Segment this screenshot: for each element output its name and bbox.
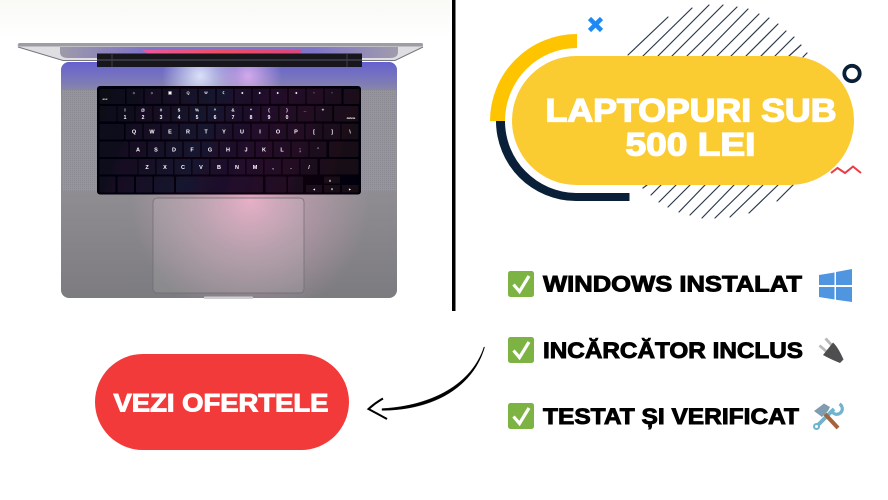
label: incarcator inclus: INCĂRCĂTOR INCLUS <box>543 338 803 363</box>
button: vezi ofertele: VEZI OFERTELE <box>114 390 328 418</box>
button: vezi ofertele <box>95 354 349 450</box>
laptop lid <box>17 43 423 60</box>
key labels: delete <box>347 116 356 120</box>
label: testat si verificat: TESTAT ȘI VERIFICAT <box>543 404 800 429</box>
icon: check mark <box>508 337 534 363</box>
feature: charger included <box>508 337 844 363</box>
key labels: QWERTYUIOP[]\ <box>132 130 351 136</box>
yellow arc <box>490 34 577 121</box>
arrow <box>368 347 485 419</box>
hatch pattern <box>628 5 807 218</box>
icon: red zigzag <box>831 166 861 173</box>
key labels: 1234567890 <box>124 115 289 121</box>
navy arc <box>496 121 630 201</box>
key labels: ZXCVBNM,./ <box>145 165 310 171</box>
feature: tested and verified <box>508 403 842 429</box>
laptop photo <box>17 43 423 299</box>
front notch <box>204 296 253 299</box>
key labels: ASDFGHJKL;' <box>136 148 319 154</box>
icon: plug <box>820 338 844 363</box>
keyboard <box>97 86 361 194</box>
title <box>546 92 836 162</box>
key labels: ▲ <box>328 178 332 182</box>
title: 500 LEI <box>626 126 756 162</box>
key labels <box>102 90 356 192</box>
icon: hammer and wrench <box>814 404 842 429</box>
feature: windows installed <box>508 269 852 302</box>
key labels: ☼☼▣QΨ☾◂▸▸◂◦◦ <box>132 90 333 95</box>
speaker grilles <box>62 90 396 191</box>
hinge <box>97 54 362 67</box>
key labels: !@#$%^&*()_+ <box>124 108 325 112</box>
key labels: ◄▼► <box>312 188 352 192</box>
trackpad <box>153 198 304 293</box>
label: windows instalat: WINDOWS INSTALAT <box>543 272 803 297</box>
divider line <box>452 0 456 311</box>
icon: check mark <box>508 403 534 429</box>
key labels: esc <box>102 97 108 101</box>
title pill <box>512 56 854 185</box>
icon: blue cross <box>590 18 602 30</box>
icon: windows logo <box>819 269 852 302</box>
icon: navy ring <box>844 66 860 81</box>
laptop base <box>61 62 397 298</box>
icon: check mark <box>508 271 534 297</box>
title: LAPTOPURI SUB <box>546 92 836 128</box>
